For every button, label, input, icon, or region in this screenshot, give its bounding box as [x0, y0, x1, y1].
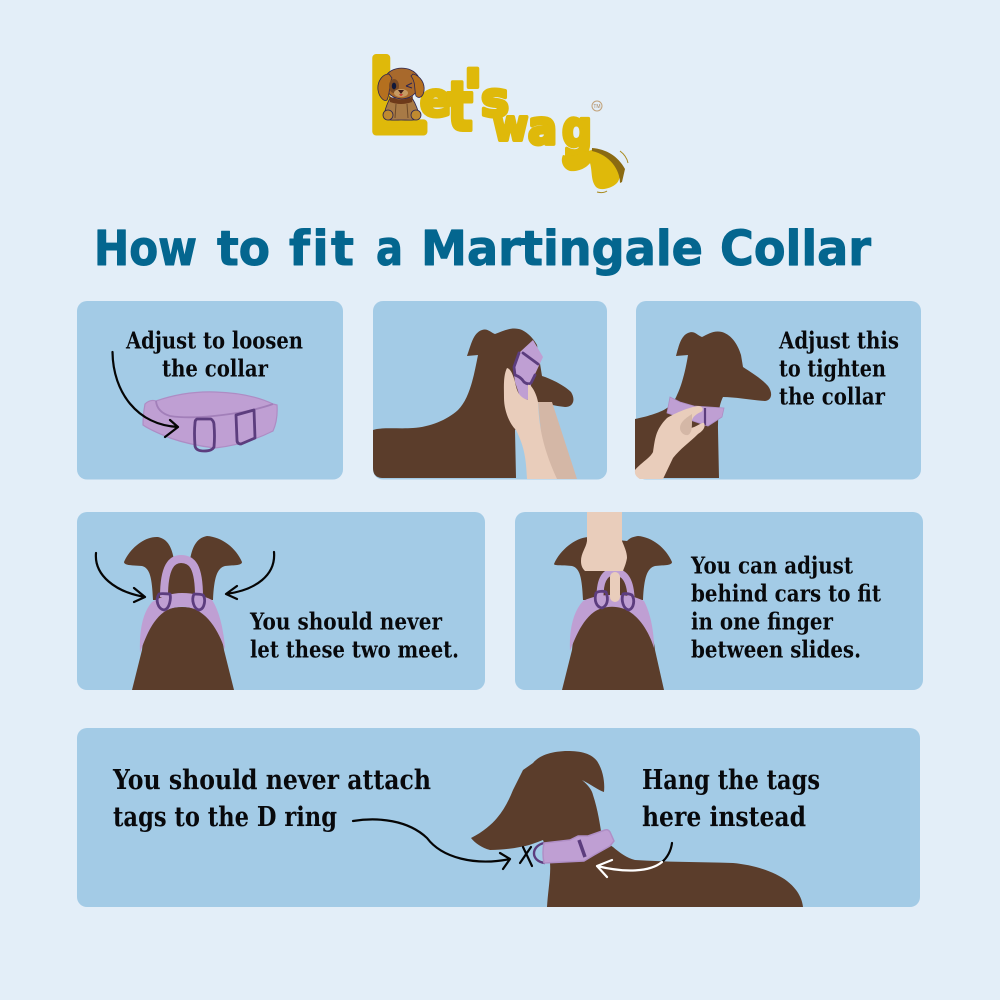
logo wordmark: g: [562, 100, 592, 158]
caption: Adjust this: [778, 328, 899, 354]
arrow to collar: [112, 352, 178, 437]
black arrow to D ring: [353, 819, 510, 869]
logo wordmark: a: [528, 101, 557, 155]
arrow to collar: tag position: [597, 843, 672, 877]
logo: trademark: TM: [593, 104, 601, 110]
arrow left: [96, 553, 145, 602]
caption left: [112, 765, 431, 833]
collar: [570, 572, 654, 651]
caption: let these two meet.: [250, 636, 459, 664]
title: to: [217, 221, 270, 277]
caption: Adjust to loosen: [125, 328, 303, 354]
caption: [125, 328, 303, 382]
dog silhouette: [635, 331, 771, 479]
hand: [635, 406, 705, 479]
collar illustration: [143, 392, 277, 451]
arrow right: [226, 552, 274, 599]
collar: [140, 559, 225, 653]
logo: tail: [562, 148, 628, 193]
caption: You should never: [249, 608, 443, 636]
slides: [595, 591, 634, 610]
logo wordmark: ': [462, 56, 484, 135]
caption: in one finger: [691, 608, 834, 636]
caption right: [642, 765, 820, 833]
caption: behind cars to fit: [691, 580, 881, 608]
logo wordmark: t: [447, 68, 473, 147]
logo: trademark: [592, 101, 602, 111]
dog from above: [554, 536, 672, 690]
title: Martingale: [421, 221, 703, 277]
collar: [667, 397, 724, 426]
hand front: [504, 368, 557, 479]
title: a: [376, 221, 403, 277]
caption: You can adjust: [690, 552, 853, 580]
X mark: [520, 847, 532, 866]
caption: the collar: [162, 356, 269, 382]
title: [94, 221, 871, 277]
caption: to tighten: [779, 356, 886, 382]
dog from above: [124, 536, 242, 690]
collar: [534, 830, 614, 863]
caption right: here instead: [642, 802, 806, 833]
hand back: [538, 402, 577, 479]
caption: [778, 328, 899, 410]
logo: puppy mascot: [378, 68, 424, 120]
logo wordmark: e: [420, 73, 451, 127]
caption right: Hang the tags: [642, 765, 820, 796]
caption: [249, 608, 459, 664]
caption: the collar: [779, 384, 886, 410]
dog silhouette: [373, 329, 573, 478]
logo: Let's wag: [368, 34, 628, 193]
logo wordmark: L: [368, 34, 427, 154]
panel: never let these two meet: [77, 512, 485, 690]
caption: [690, 552, 881, 664]
caption left: tags to the D ring: [113, 802, 337, 833]
logo wordmark: s: [481, 73, 509, 128]
title: Collar: [720, 221, 871, 277]
caption: between slides.: [691, 636, 861, 664]
panel: hand adjusting collar on dog: [373, 301, 607, 480]
dog profile: [471, 751, 803, 907]
panel: adjust to tighten: [635, 301, 921, 480]
caption left: You should never attach: [112, 765, 431, 796]
logo wordmark: [368, 34, 592, 158]
title: How: [94, 221, 197, 277]
logo wordmark: w: [493, 101, 528, 150]
panel: where to hang tags: [77, 728, 920, 907]
collar: [513, 340, 543, 400]
hand and finger: [581, 512, 627, 602]
title: fit: [289, 221, 357, 277]
panel: adjust to loosen: [77, 301, 343, 480]
panel: one finger between slides: [515, 512, 923, 690]
